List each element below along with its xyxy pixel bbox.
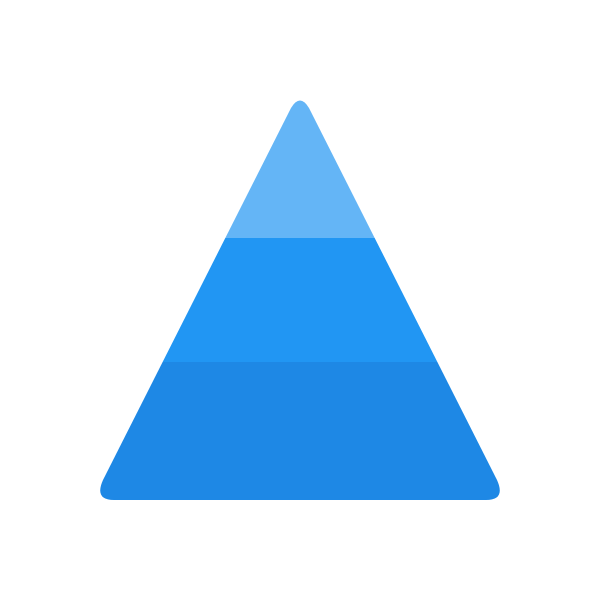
pyramid chart xyxy=(100,100,500,500)
tier: middle xyxy=(162,238,438,362)
tier: bottom xyxy=(100,362,500,500)
tier: top xyxy=(225,100,375,238)
